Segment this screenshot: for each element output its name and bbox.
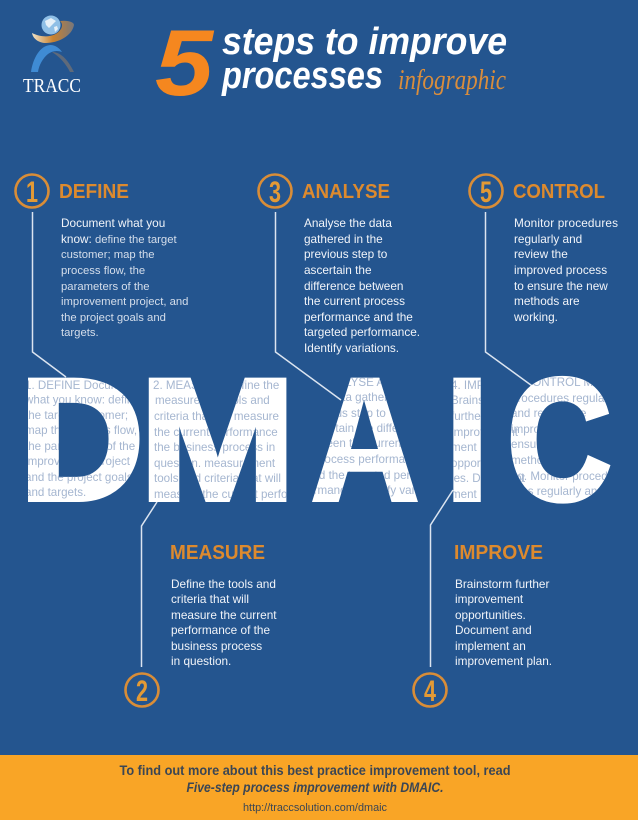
connector: improve — [430, 490, 453, 667]
heading: measure: MEASURE — [170, 541, 265, 564]
text texture inside letters: further — [451, 410, 485, 423]
text texture inside letters: previous step to — [304, 407, 386, 420]
panel: improve — [414, 541, 552, 708]
text texture inside letters: question. measurement — [154, 457, 276, 470]
title numeral 5: 5 — [155, 10, 215, 115]
text texture inside letters: and the targeted per- — [306, 469, 414, 482]
text: analyse body: Analyse the data — [304, 216, 392, 230]
connector: define — [32, 212, 66, 377]
text: measure body: business process — [171, 639, 262, 653]
big letters: M — [140, 344, 296, 536]
text: analyse body: the current process — [304, 294, 405, 308]
step 4 badge — [414, 674, 446, 708]
text: define body: process flow, the — [61, 265, 145, 277]
text: measure body: in question. — [171, 654, 231, 668]
title line 1: steps to improve — [222, 21, 507, 63]
text texture inside letters: method — [511, 454, 550, 467]
text: improve body: implement an — [455, 639, 526, 653]
text texture inside letters: 1. DEFINE Document — [25, 379, 137, 392]
panel: measure — [126, 541, 277, 708]
text texture inside letters: process performance — [314, 453, 424, 466]
big letters: I — [446, 344, 488, 536]
text texture inside letters: criteria that will measure — [154, 410, 279, 423]
big letters: A — [312, 343, 418, 536]
step 3 badge — [258, 174, 292, 209]
text: define body: parameters of the — [61, 281, 150, 293]
text: analyse body: gathered in the — [304, 232, 383, 246]
step 5 badge: 5 — [480, 176, 492, 209]
text: improve body — [455, 577, 552, 668]
step 3 badge: 3 — [269, 176, 281, 209]
step 4 badge: 4 — [424, 675, 436, 708]
text texture inside letters: map the process flow, — [25, 424, 137, 437]
connector: measure — [142, 502, 157, 667]
text texture inside letters: ment and — [451, 488, 499, 501]
connector: control — [486, 212, 535, 388]
footer band — [0, 755, 638, 821]
step 1 badge — [16, 174, 48, 209]
step 1 badge: 1 — [26, 176, 38, 209]
step 2 badge — [126, 674, 158, 708]
DMAIC big letters with text texture — [28, 376, 610, 504]
text: analyse body: performance and the — [304, 310, 413, 324]
text: analyse body: Identify variations. — [304, 341, 399, 355]
text texture inside letters: improved — [511, 423, 559, 436]
panel: analyse — [258, 174, 420, 355]
icon: orange swoosh — [32, 21, 74, 43]
text texture inside letters: the data gathered in — [310, 391, 413, 404]
text: analyse body: previous step to — [304, 247, 388, 261]
text texture inside letters: what you know: define — [24, 394, 140, 406]
text texture inside letters: formance. Identify varia — [304, 484, 425, 497]
text texture inside letters: measure the current perfo — [154, 488, 287, 501]
text: improve body: improvement — [455, 592, 524, 606]
text texture inside letters: 3. ANALYSE Analyse — [309, 376, 418, 389]
text: analyse body — [304, 216, 420, 355]
big letters — [20, 343, 611, 536]
text: control body: regularly and — [514, 232, 582, 246]
footer line 1: To find out more about this best practice improvement tool, read — [120, 763, 510, 778]
text texture inside letters: ensure — [511, 438, 546, 451]
text: control body: Monitor procedures — [514, 216, 618, 230]
text: define body: targets. — [61, 327, 99, 339]
logo wordmark: TRACC — [23, 75, 81, 97]
title line 2: processes — [221, 55, 383, 97]
text texture inside letters: ies. Document — [451, 472, 526, 485]
text: control body: review the — [514, 247, 568, 261]
text texture inside letters: ng. Monitor procedures — [511, 470, 630, 483]
text texture inside letters: ment — [451, 441, 478, 454]
text: measure body: Define the tools and — [171, 577, 276, 591]
footer url: http://traccsolution.com/dmaic — [243, 802, 387, 814]
text: measure body — [171, 577, 277, 668]
text: define body: improvement project, and — [61, 296, 188, 308]
text texture inside letters: the business process in — [154, 441, 275, 454]
text: measure body: measure the current — [171, 608, 277, 622]
text: define body — [61, 216, 188, 339]
text: control body: improved process — [514, 263, 607, 277]
text: control body: to ensure the new — [514, 279, 608, 293]
icon: grey arch — [52, 52, 74, 72]
text: define body: the project goals and — [61, 312, 166, 324]
text texture inside letters: 4. IMPROVE — [451, 379, 518, 392]
heading: improve: IMPROVE — [454, 541, 543, 564]
step 5 badge — [470, 174, 502, 209]
text: improve body: Brainstorm further — [455, 577, 549, 591]
text: control body — [513, 216, 618, 324]
text texture inside letters: 5. CONTROL Monitor — [511, 376, 622, 389]
heading: define: DEFINE — [59, 180, 129, 203]
text: measure body: criteria that will — [171, 592, 249, 606]
text texture inside letters: and review the — [511, 407, 586, 420]
title — [155, 10, 507, 115]
text texture inside letters: the current performance — [154, 426, 278, 439]
text: improve body: opportunities. — [455, 608, 526, 622]
text texture inside letters: tools and criteria that will — [154, 472, 281, 485]
text: analyse body: difference between — [304, 279, 403, 293]
connector: analyse — [276, 212, 341, 400]
footer line 2: Five-step process improvement with DMAIC. — [186, 780, 444, 795]
text texture inside letters: and the project goals — [25, 471, 133, 484]
title script word: infographic — [398, 65, 506, 96]
text: improve body: improvement plan. — [455, 654, 552, 668]
text texture inside letters: improvement project — [25, 455, 131, 468]
text: control body: methods are — [514, 294, 580, 308]
text texture inside letters: ures regularly and — [511, 485, 604, 498]
step 2 badge: 2 — [136, 675, 148, 708]
icon: globe — [42, 16, 60, 34]
text: define body: Document what you — [61, 216, 165, 230]
text texture inside letters: procedures regularly — [511, 392, 617, 405]
text texture inside letters: the target customer; — [25, 409, 128, 422]
text texture inside letters — [24, 376, 630, 501]
text: improve body: Document and — [455, 623, 532, 637]
text: define body: know: define the target — [61, 232, 177, 246]
text texture inside letters: Brainstorm — [451, 394, 507, 407]
heading: analyse: ANALYSE — [302, 180, 390, 203]
big letters: C — [507, 344, 611, 536]
text texture inside letters: measure the tools and — [155, 394, 270, 407]
text: analyse body: ascertain the — [304, 263, 372, 277]
icon: blue arch — [31, 45, 62, 72]
logo: TRACC — [23, 16, 81, 97]
text: analyse body: targeted performance. — [304, 325, 420, 339]
text: measure body: performance of the — [171, 623, 270, 637]
text texture inside letters: 2. MEASURE Define the — [153, 379, 279, 392]
panel: control — [470, 174, 618, 324]
big letters: D — [20, 344, 144, 536]
text: control body: working. — [513, 310, 558, 324]
heading: control: CONTROL — [513, 180, 605, 203]
text texture inside letters: and targets. — [25, 486, 86, 499]
panel: define — [16, 174, 188, 339]
text texture inside letters: improvement — [451, 426, 519, 439]
text texture inside letters: ascertain the difference — [307, 422, 427, 435]
text texture inside letters: opportunit — [451, 457, 503, 470]
text: define body: customer; map the — [61, 249, 155, 261]
text texture inside letters: between the current — [302, 437, 405, 450]
text texture inside letters: the parameters of the — [25, 440, 135, 453]
